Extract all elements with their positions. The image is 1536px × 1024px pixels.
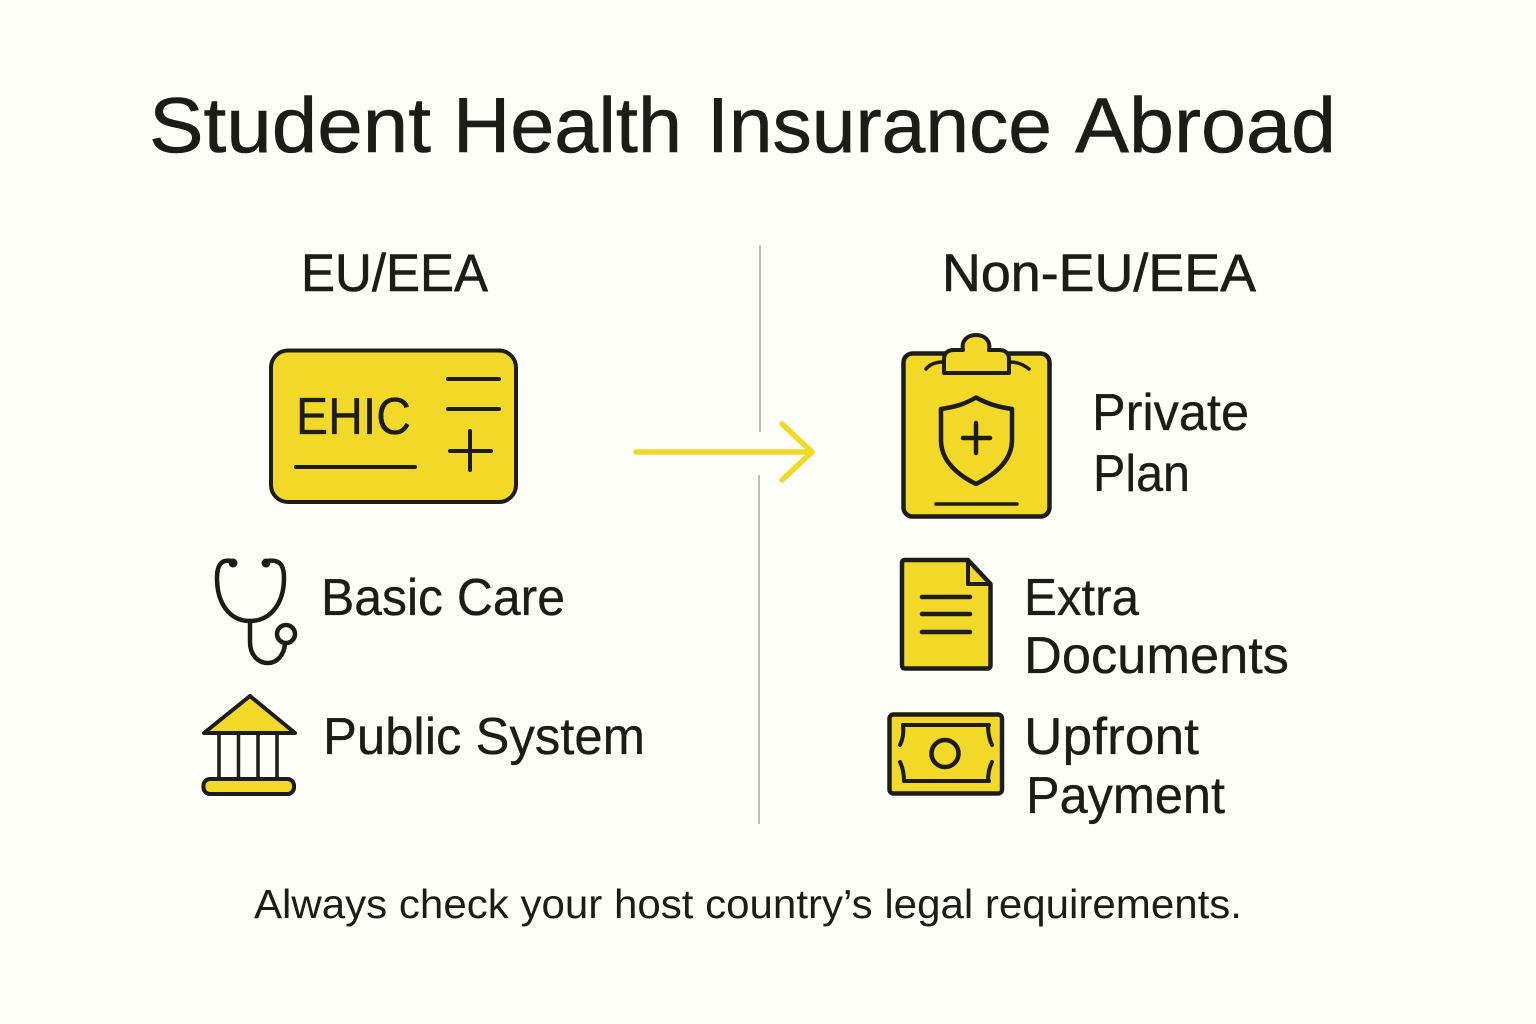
icon: public building — [204, 696, 295, 794]
label: Extra Documents: Extra — [1024, 569, 1139, 627]
label: Extra Documents: Documents — [1024, 627, 1289, 685]
label: Public System: Public System — [323, 708, 645, 766]
heading: EU/EEA: EU/EEA — [301, 244, 489, 303]
footer note: Always check your host country’s legal requirements. — [254, 881, 1242, 927]
divider line — [759, 245, 760, 824]
label: Private Plan: Plan — [1093, 445, 1190, 503]
title: Insurance — [707, 81, 1052, 169]
icon: EHIC card: EHIC — [296, 388, 411, 446]
title: Health — [453, 81, 682, 169]
title — [149, 81, 1336, 169]
label: Private Plan: Private — [1092, 384, 1249, 442]
label: Upfront Payment: Payment — [1026, 767, 1226, 825]
label: Upfront Payment — [1024, 708, 1226, 825]
title: Abroad — [1075, 81, 1336, 169]
heading: Non-EU/EEA: Non-EU/EEA — [942, 244, 1257, 303]
icon: EHIC card — [271, 350, 516, 502]
label: Extra Documents — [1024, 569, 1289, 685]
label: Upfront Payment: Upfront — [1024, 708, 1200, 766]
icon: clipboard with shield — [904, 335, 1050, 516]
arrow — [636, 424, 812, 480]
label: Private Plan — [1092, 384, 1249, 503]
icon: banknote — [890, 714, 1002, 794]
icon: document — [902, 560, 990, 668]
label: Basic Care: Basic Care — [321, 569, 565, 627]
icon: stethoscope — [217, 560, 295, 663]
title: Student — [149, 81, 431, 169]
